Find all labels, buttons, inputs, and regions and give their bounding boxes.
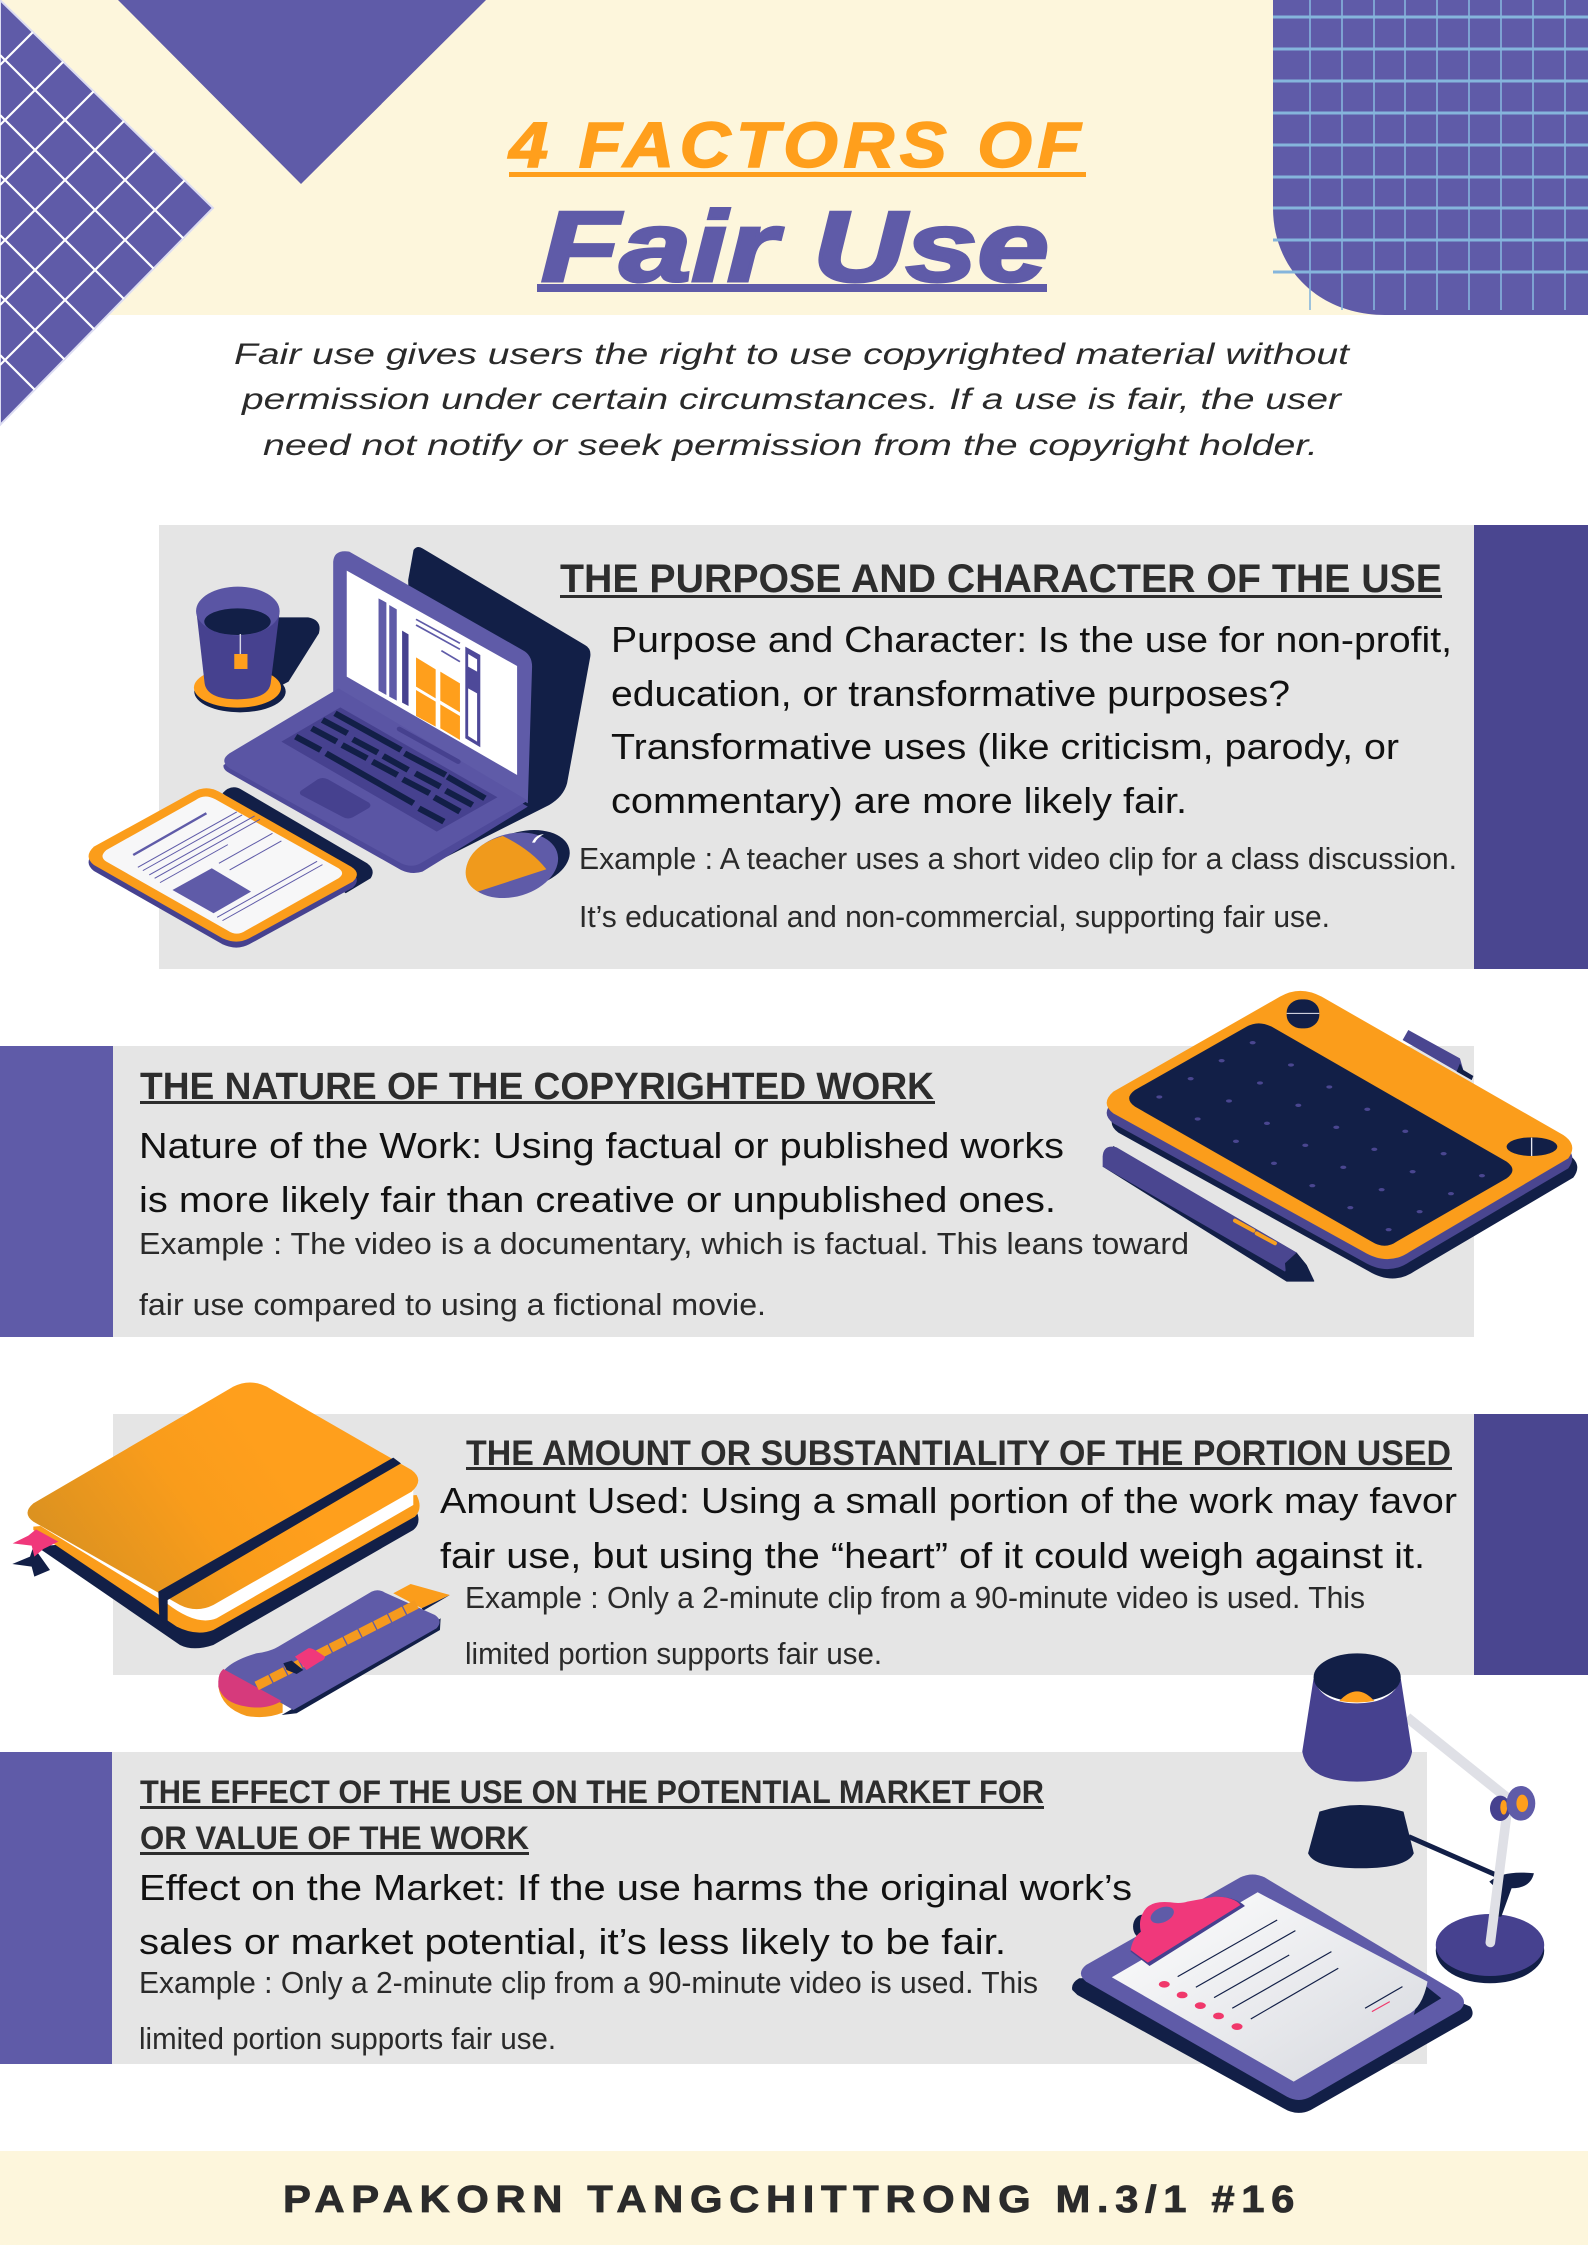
intro text: permission under certain circumstances. If a use is fair, the user bbox=[241, 383, 1342, 416]
body text bbox=[139, 1867, 1132, 1962]
body text bbox=[440, 1480, 1457, 1576]
icon: box cutter bbox=[218, 1584, 450, 1717]
icon: desk lamp bbox=[1302, 1653, 1544, 1983]
icon: laptop bbox=[223, 547, 590, 873]
heading: THE AMOUNT OR SUBSTANTIALITY OF THE PORTION USED bbox=[466, 1434, 1451, 1473]
title line 1: 4 FACTORS OF bbox=[507, 109, 1086, 181]
example text bbox=[465, 1580, 1365, 1671]
intro text: Fair use gives users the right to use copyrighted material without bbox=[234, 338, 1351, 371]
illustration: drawing tablet and pen bbox=[1103, 991, 1577, 1282]
panel: purpose and character bbox=[89, 525, 1588, 969]
example text: limited portion supports fair use. bbox=[465, 1636, 882, 1671]
example text: Example : Only a 2-minute clip from a 90-minute video is used. This bbox=[465, 1580, 1365, 1615]
example text: fair use compared to using a fictional movie. bbox=[139, 1287, 766, 1322]
heading: THE EFFECT OF THE USE ON THE POTENTIAL MARKET FOR bbox=[140, 1774, 1044, 1810]
illustration: lamp and clipboard bbox=[1072, 1653, 1544, 2113]
heading: THE NATURE OF THE COPYRIGHTED WORK bbox=[140, 1066, 935, 1108]
icon: mouse bbox=[457, 821, 577, 909]
icon: notebook bbox=[12, 1382, 420, 1648]
footer credit: PAPAKORN TANGCHITTRONG M.3/1 #16 bbox=[283, 2179, 1301, 2221]
example text: Example : A teacher uses a short video clip for a class discussion. bbox=[579, 841, 1457, 876]
heading: THE PURPOSE AND CHARACTER OF THE USE bbox=[560, 557, 1442, 601]
body text: Transformative uses (like criticism, parody, or bbox=[611, 726, 1399, 767]
illustration: notebook and cutter bbox=[12, 1382, 450, 1717]
body text: Amount Used: Using a small portion of the work may favor bbox=[440, 1480, 1457, 1521]
heading bbox=[140, 1774, 1044, 1856]
example text bbox=[139, 1965, 1038, 2056]
intro text bbox=[234, 338, 1351, 462]
example text bbox=[139, 1226, 1189, 1322]
example text: It’s educational and non-commercial, supporting fair use. bbox=[579, 899, 1330, 934]
right grid panel bbox=[1273, 0, 1588, 315]
example text: Example : The video is a documentary, which is factual. This leans toward bbox=[139, 1226, 1189, 1261]
footer band bbox=[0, 2151, 1588, 2245]
body text: fair use, but using the “heart” of it could weigh against it. bbox=[440, 1535, 1425, 1576]
left diamond grid bbox=[0, 0, 214, 426]
panel: amount used bbox=[12, 1382, 1588, 1717]
body text bbox=[611, 619, 1452, 821]
icon: cup bbox=[194, 587, 320, 712]
icon: clipboard bbox=[1072, 1874, 1473, 2113]
illustration: laptop desk bbox=[89, 547, 590, 948]
icon: graphics tablet bbox=[1107, 991, 1577, 1278]
body text: education, or transformative purposes? bbox=[611, 673, 1290, 714]
body text: Purpose and Character: Is the use for non-profit, bbox=[611, 619, 1452, 660]
header band bbox=[0, 0, 1588, 426]
intro text: need not notify or seek permission from the copyright holder. bbox=[263, 429, 1318, 462]
panel: effect on the market bbox=[0, 1653, 1544, 2113]
title line 2: Fair Use bbox=[541, 191, 1049, 303]
panel: nature of the work bbox=[0, 991, 1577, 1337]
body text: commentary) are more likely fair. bbox=[611, 780, 1187, 821]
heading: OR VALUE OF THE WORK bbox=[140, 1820, 529, 1856]
example text bbox=[579, 841, 1457, 934]
icon: tablet document bbox=[89, 787, 373, 948]
body text: sales or market potential, it’s less likely to be fair. bbox=[139, 1921, 1006, 1962]
body text: Nature of the Work: Using factual or published works bbox=[139, 1125, 1064, 1166]
example text: limited portion supports fair use. bbox=[139, 2021, 556, 2056]
triangle decoration bbox=[118, 0, 486, 184]
body text: is more likely fair than creative or unpublished ones. bbox=[139, 1179, 1056, 1220]
body text bbox=[139, 1125, 1064, 1220]
icon: pen bbox=[1103, 1146, 1314, 1282]
example text: Example : Only a 2-minute clip from a 90-minute video is used. This bbox=[139, 1965, 1038, 2000]
body text: Effect on the Market: If the use harms the original work’s bbox=[139, 1867, 1132, 1908]
